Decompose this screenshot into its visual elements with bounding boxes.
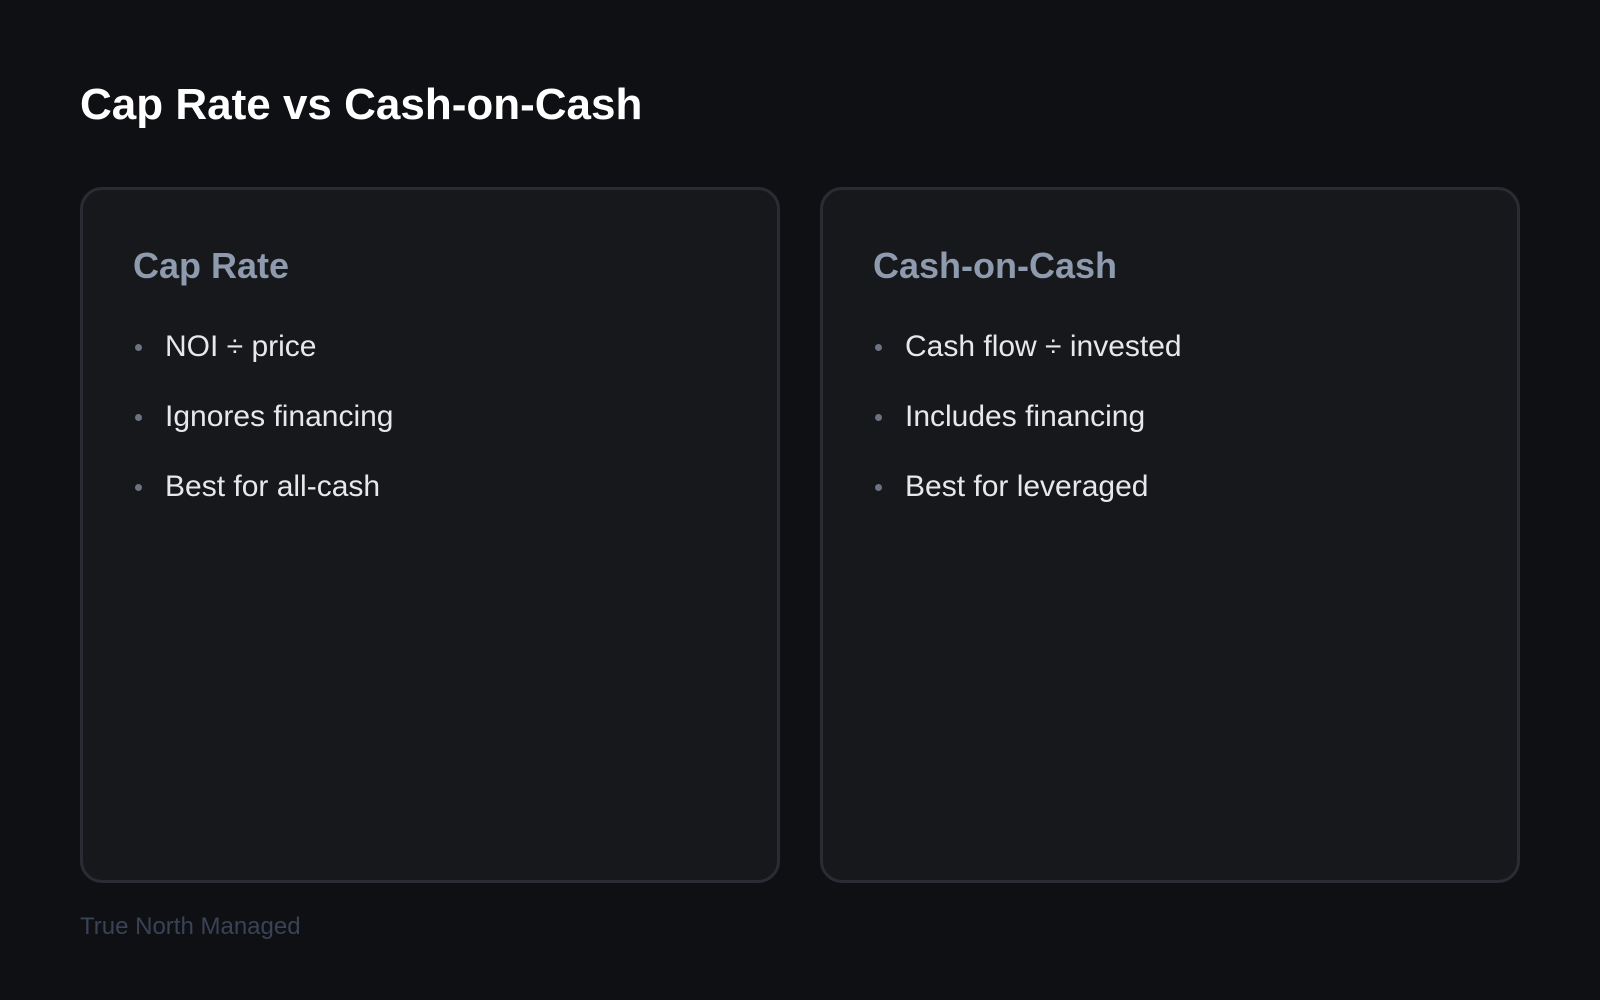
panel: cap rate <box>80 187 780 883</box>
panel: cash-on-cash <box>820 187 1520 883</box>
bullet: ignores financing: Ignores financing <box>165 400 394 433</box>
bullet: best for all-cash: Best for all-cash <box>165 470 380 503</box>
bullet list: cash-on-cash <box>875 330 1182 503</box>
bullet list: cap rate <box>135 330 394 503</box>
bullet: best for leveraged: Best for leveraged <box>905 470 1148 503</box>
heading: cap rate: Cap Rate <box>133 245 289 286</box>
title: Cap Rate vs Cash-on-Cash <box>80 80 642 129</box>
bullet: cash flow ÷ invested: Cash flow ÷ invested <box>905 330 1182 363</box>
bullet: includes financing: Includes financing <box>905 400 1145 433</box>
heading: cash-on-cash: Cash-on-Cash <box>873 245 1117 286</box>
footer: True North Managed <box>80 913 301 940</box>
bullet: NOI ÷ price: NOI ÷ price <box>165 330 316 363</box>
